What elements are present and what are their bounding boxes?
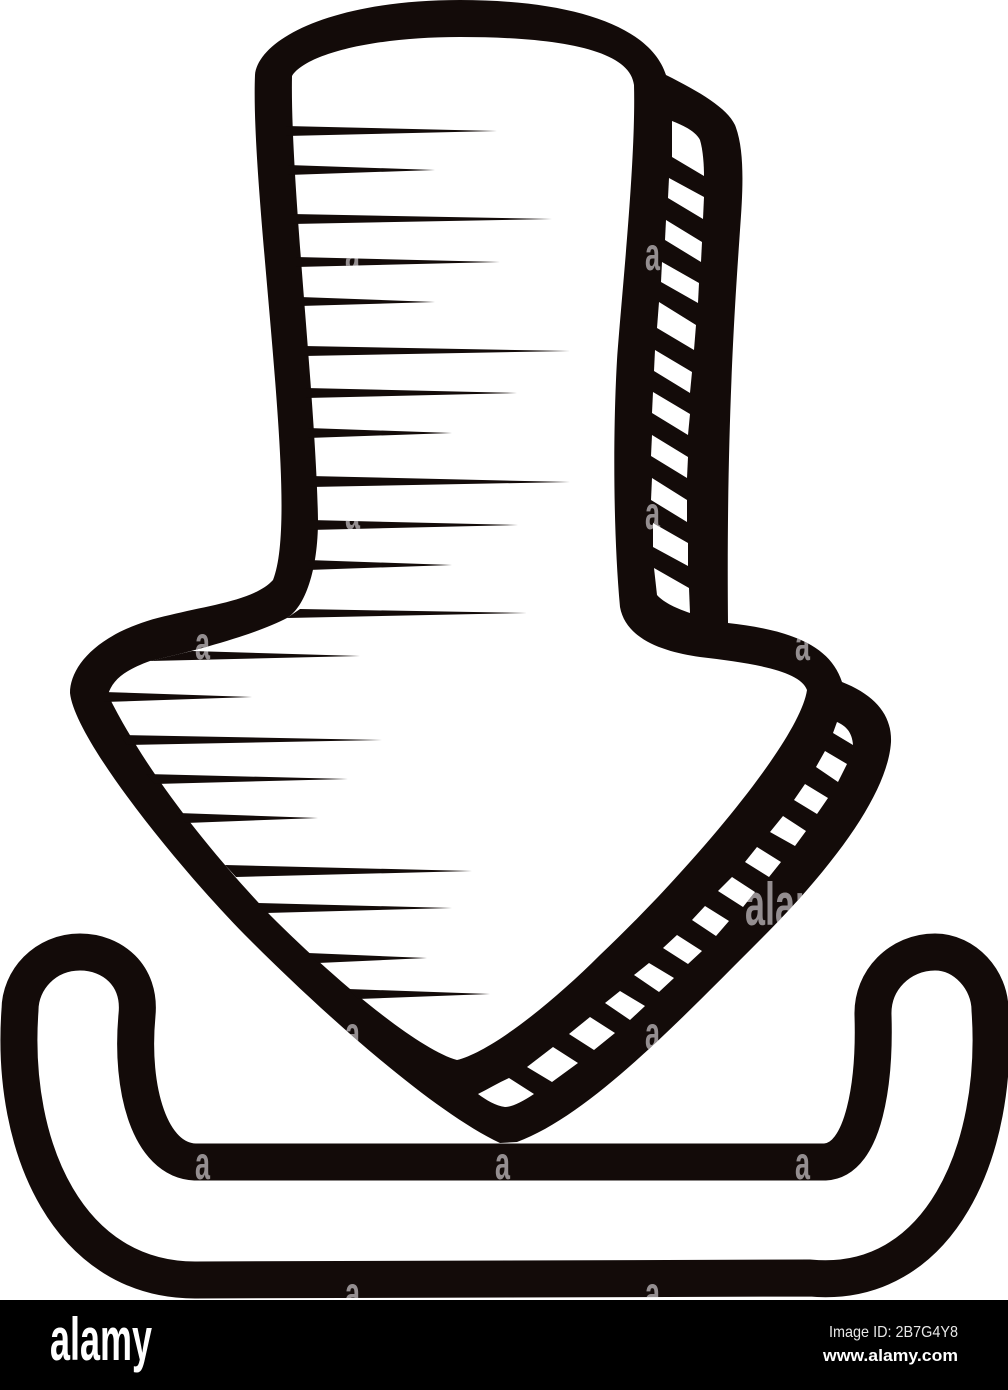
shading hatch spikes (104, 126, 570, 999)
watermark marks (195, 98, 847, 1319)
arrow white interior (108, 37, 807, 1060)
website: www.alamy.com (822, 1346, 958, 1365)
watermark marks: a (645, 1267, 660, 1319)
watermark marks: a (345, 487, 360, 539)
watermark marks: a (345, 1267, 360, 1319)
watermark marks: a (795, 1137, 810, 1189)
watermark marks: a (195, 98, 210, 150)
footer logo: alamy (50, 1306, 152, 1373)
watermark marks: a (195, 617, 210, 669)
watermark marks: a (495, 1137, 510, 1189)
icon: download arrow (70, 0, 891, 1143)
icon: tray (19, 952, 991, 1280)
image id: Image ID: 2B7G4Y8 (829, 1324, 958, 1341)
watermark marks: a (795, 98, 810, 150)
footer bar (0, 1300, 1008, 1390)
watermark marks: a (345, 228, 360, 280)
arrow outline (70, 0, 891, 1143)
watermark marks: a (195, 1137, 210, 1189)
watermark marks: a (795, 618, 810, 670)
watermark marks: a (645, 1007, 660, 1059)
watermark marks: a (495, 98, 510, 150)
watermark marks: a (345, 1007, 360, 1059)
watermark marks: a (645, 487, 660, 539)
watermark marks: alamy (745, 871, 847, 938)
watermark marks: a (645, 228, 660, 280)
right side stripe slots (478, 121, 853, 1107)
